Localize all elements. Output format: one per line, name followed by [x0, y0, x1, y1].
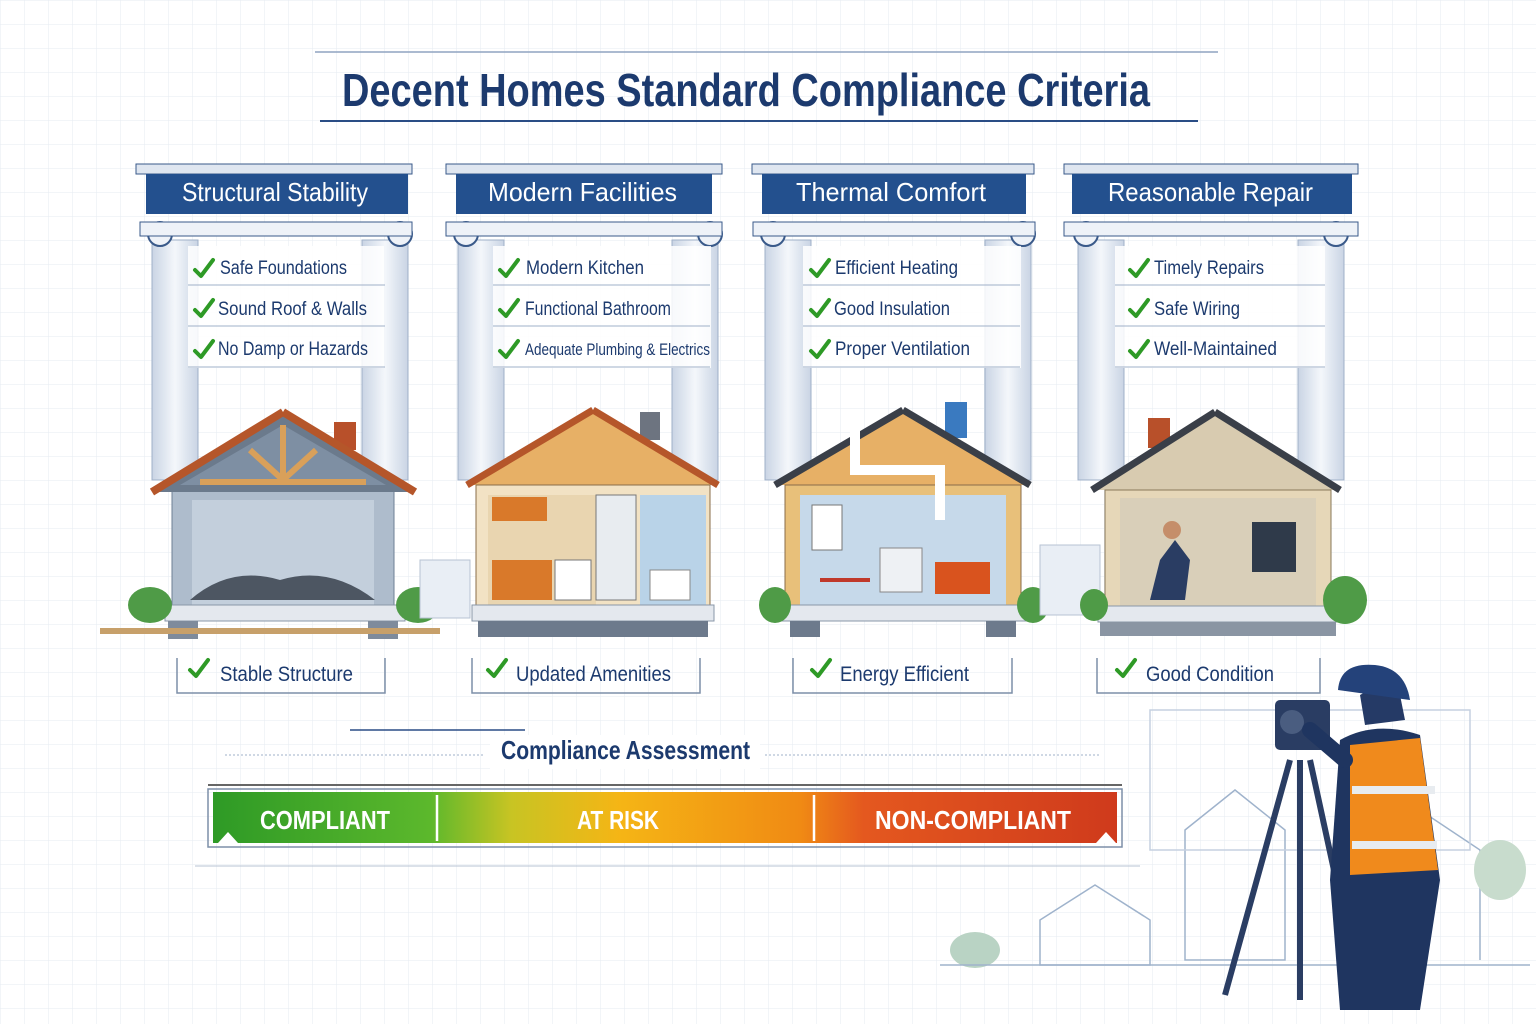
panel: reasonable repair: [1064, 164, 1367, 636]
illustration: surveyor: [1225, 665, 1440, 1010]
heading: thermal comfort: [762, 174, 1026, 214]
checklist: Good Insulation: [834, 299, 950, 320]
checklist: Sound Roof & Walls: [218, 299, 367, 320]
checklist: Proper Ventilation: [835, 339, 970, 360]
panel: reasonable repair: Reasonable Repair: [1108, 177, 1313, 207]
heading: compliance assessment: [225, 730, 1100, 769]
label: stable structure: Stable Structure: [220, 663, 353, 686]
checklist: [188, 246, 385, 368]
heading: reasonable repair: [1072, 174, 1352, 214]
house: thermal: [759, 402, 1100, 637]
checklist: Functional Bathroom: [525, 299, 671, 320]
label: updated amenities: [472, 658, 700, 693]
house: repair: [1080, 412, 1367, 636]
panel: modern facilities: [420, 164, 722, 637]
checklist: Efficient Heating: [835, 258, 958, 279]
panel: modern facilities: Modern Facilities: [488, 177, 677, 207]
panel: structural stability: Structural Stability: [182, 177, 368, 207]
gauge: compliance scale: AT RISK: [577, 805, 659, 835]
label: energy efficient: Energy Efficient: [840, 663, 969, 686]
label: good condition: [1097, 658, 1320, 693]
checklist: Modern Kitchen: [526, 258, 644, 279]
title: Decent Homes Standard Compliance Criteria: [342, 64, 1150, 116]
background sketch: houses: [940, 710, 1530, 968]
panel: thermal comfort: [752, 164, 1100, 637]
gauge: compliance scale: NON-COMPLIANT: [875, 805, 1071, 835]
checklist: [803, 246, 1021, 368]
house: modern: [420, 410, 718, 637]
gauge: compliance scale: [195, 785, 1140, 866]
panel: structural stability: [100, 164, 440, 639]
gauge: compliance scale: COMPLIANT: [260, 805, 390, 835]
label: stable structure: [177, 658, 385, 693]
panel: thermal comfort: Thermal Comfort: [796, 177, 987, 207]
heading: compliance assessment: Compliance Assessment: [501, 735, 750, 765]
house: structural: [100, 412, 440, 639]
checklist: Timely Repairs: [1154, 258, 1264, 279]
checklist: Well-Maintained: [1154, 339, 1277, 360]
checklist: [493, 246, 711, 368]
heading: structural stability: [146, 174, 408, 214]
checklist: Safe Foundations: [220, 258, 347, 279]
label: updated amenities: Updated Amenities: [516, 663, 671, 686]
heading: modern facilities: [456, 174, 712, 214]
checklist: Safe Wiring: [1154, 299, 1240, 320]
label: good condition: Good Condition: [1146, 663, 1274, 686]
checklist: No Damp or Hazards: [218, 339, 368, 360]
checklist: Adequate Plumbing & Electrics: [525, 340, 710, 359]
checklist: [1115, 246, 1325, 368]
label: energy efficient: [793, 658, 1012, 693]
